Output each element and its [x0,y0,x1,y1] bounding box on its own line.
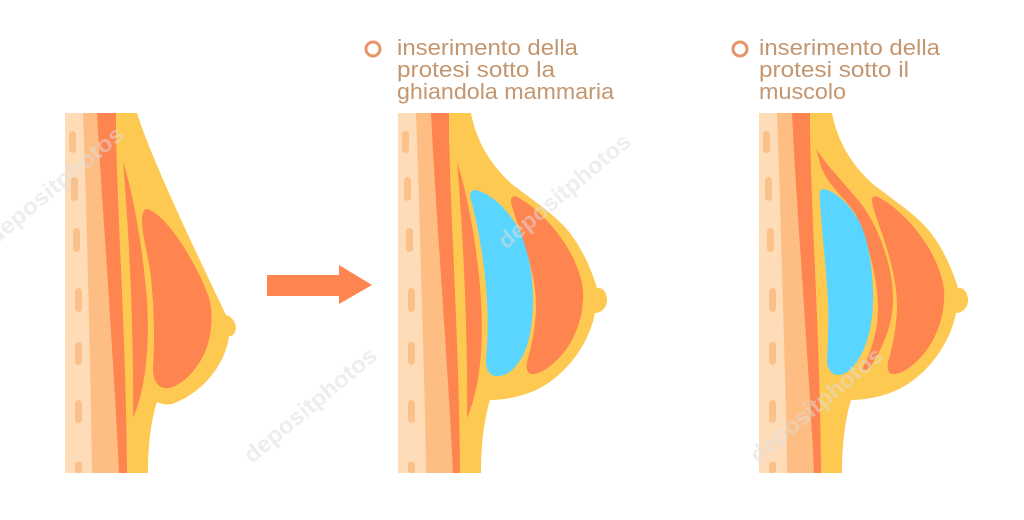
skin dashes [402,131,415,473]
skin layer [759,113,789,473]
legend: implant under the gland [366,35,615,104]
skin layer [65,113,95,473]
legend: implant under the muscle: protesi sotto il [759,57,909,82]
skin dashes [763,131,776,473]
bullet [366,42,380,56]
figure: implant under the gland [398,113,607,473]
implant [820,189,873,375]
watermarks: depositphotos [239,342,382,468]
label text: inserimento della [759,35,941,60]
chest muscle [792,113,821,473]
chest muscle [97,113,127,473]
mammary gland [142,209,212,388]
legend: implant under the gland: protesi sotto la [397,57,556,82]
label text: inserimento della [397,35,579,60]
pectoral muscle [457,162,482,418]
breast outer fat shape [116,113,236,473]
skin layer [398,113,428,473]
figure: implant under the muscle [759,113,968,473]
implant [470,190,533,376]
mammary gland [872,196,944,374]
breast outer fat shape [810,113,968,473]
legend: implant under the muscle: muscolo [759,79,846,104]
tissue layer [777,113,821,473]
pectoral muscle [123,162,148,418]
breast outer fat shape [449,113,607,473]
watermarks: depositphotos [745,342,888,468]
mammary gland [511,196,583,374]
figure: breast before surgery [65,113,236,473]
legend: implant under the gland: ghiandola mammaria [397,79,615,104]
watermarks [0,121,888,468]
legend: implant under the muscle [733,35,941,104]
tissue layer [416,113,460,473]
arrow [267,265,372,304]
tissue layer [83,113,127,473]
pectoral muscle [816,148,893,370]
skin dashes [69,131,82,473]
watermarks: depositphotos [493,128,636,254]
bullet [733,42,747,56]
chest muscle [431,113,460,473]
